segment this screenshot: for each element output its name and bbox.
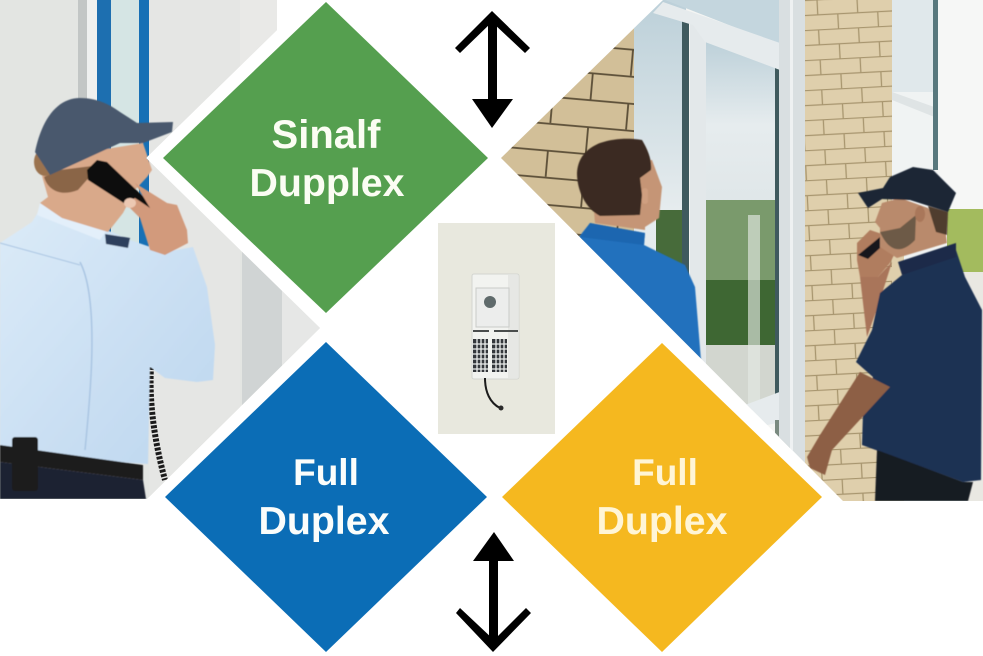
cap xyxy=(35,98,173,175)
window glass right xyxy=(706,40,776,210)
window glass left xyxy=(634,0,686,250)
phone cord xyxy=(151,367,165,480)
label: Sinalf: Sinalf xyxy=(272,113,381,157)
pillar xyxy=(805,0,893,505)
label: Duplex yellow: Duplex xyxy=(596,499,728,543)
man in blue shirt xyxy=(577,139,701,360)
panel: wall intercom device xyxy=(438,223,555,434)
forearm raised xyxy=(860,262,892,337)
icon: intercom body xyxy=(472,274,519,379)
phone xyxy=(86,160,150,208)
label: Full: Full xyxy=(293,452,359,493)
hand xyxy=(125,183,188,255)
diamond: green xyxy=(163,2,488,313)
man in navy shirt xyxy=(807,167,982,501)
brick wall xyxy=(501,28,635,240)
photo: two men at building xyxy=(490,0,983,510)
label: Dupplex: Dupplex xyxy=(249,161,405,205)
icon: device cable xyxy=(485,378,504,410)
window frame top xyxy=(653,2,780,70)
holster xyxy=(12,437,38,491)
arrow: top up-down xyxy=(455,11,530,128)
belt xyxy=(0,445,143,480)
diamond: yellow xyxy=(502,343,822,652)
background right xyxy=(892,92,893,201)
label: Full yellow: Full xyxy=(632,452,698,493)
guard figure xyxy=(0,98,215,499)
photo: security guard on phone xyxy=(0,0,330,510)
label: Duplex blue: Duplex xyxy=(258,499,390,543)
diamond: blue xyxy=(165,342,487,652)
arrow: bottom up-down xyxy=(456,532,531,652)
